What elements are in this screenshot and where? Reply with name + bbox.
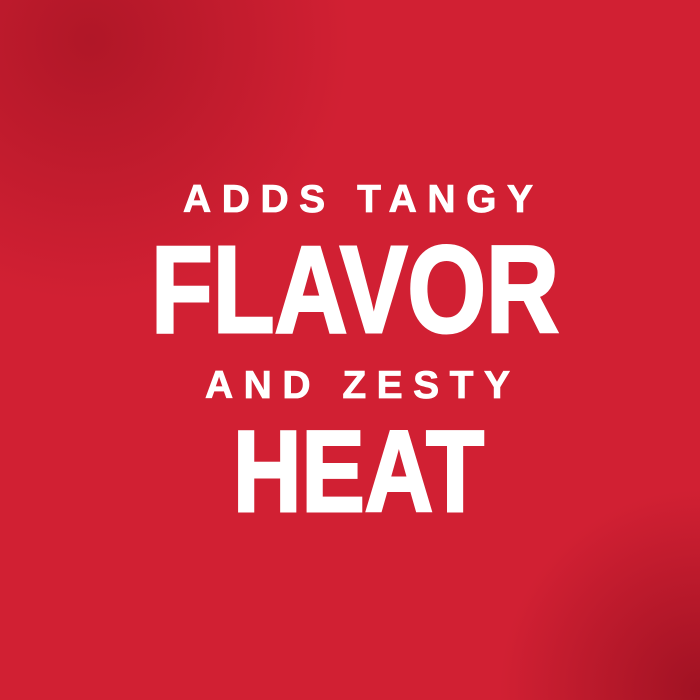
line: AND ZESTY: AND ZESTY bbox=[205, 364, 510, 407]
line: FLAVOR: FLAVOR bbox=[151, 222, 559, 359]
line: ADDS TANGY: ADDS TANGY bbox=[183, 178, 533, 221]
line: HEAT: HEAT bbox=[233, 408, 484, 536]
